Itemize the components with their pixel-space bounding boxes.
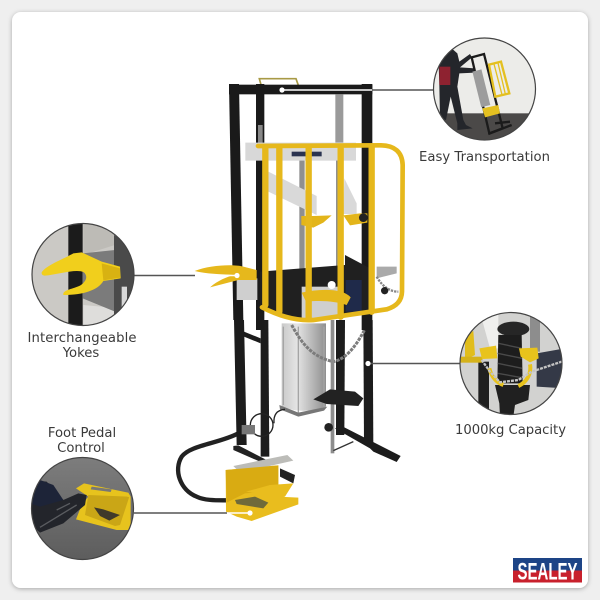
shoe and leg (30, 480, 87, 533)
label: Interchangeable (28, 331, 136, 346)
foot pedal (280, 468, 295, 483)
leader line (365, 361, 460, 366)
label: Foot Pedal (48, 426, 116, 441)
yokes (479, 346, 497, 359)
press rails (472, 54, 503, 133)
lower bed (260, 255, 373, 318)
ram column (335, 94, 343, 143)
hose (178, 433, 238, 500)
callout: easy transportation (279, 37, 550, 165)
pedal (76, 483, 131, 530)
leader line (134, 510, 253, 516)
label: Easy Transportation (419, 150, 550, 165)
cylinder (282, 323, 326, 411)
photo: spring in yokes (460, 313, 562, 414)
frame uprights (229, 84, 243, 320)
front yoke on left (237, 278, 257, 300)
callout: foot pedal control (30, 426, 253, 563)
photo: moving the press (434, 38, 535, 140)
arms (268, 172, 317, 215)
lower yoke (302, 290, 351, 305)
label line 2: Yokes (62, 346, 99, 361)
photo border (32, 458, 134, 560)
feet (488, 122, 512, 134)
photo border (32, 224, 134, 326)
photo: yoke (32, 224, 134, 325)
photo border (460, 312, 562, 414)
illustration: spring compressor upper section (195, 79, 403, 330)
yellow guard (258, 145, 403, 320)
callout: 1000kg capacity (365, 310, 566, 438)
leader line (134, 273, 240, 278)
crosshead (245, 143, 356, 161)
guard (489, 62, 509, 97)
callout: interchangeable yokes (28, 222, 240, 361)
label: 1000kg Capacity (455, 423, 566, 438)
pedal rod and plate (331, 320, 334, 453)
worker (439, 48, 475, 130)
leader line (279, 87, 434, 93)
side chain hook (377, 267, 397, 278)
upper yokes (301, 215, 332, 228)
rear uprights and feet (234, 320, 247, 445)
photo border (434, 38, 536, 140)
valve and loop (250, 414, 273, 436)
chain (482, 360, 562, 382)
photo: foot on pedal (32, 458, 133, 559)
carry handle (259, 79, 298, 85)
illustration: spring compressor lower section (178, 320, 401, 521)
chain (292, 320, 369, 362)
top bar (229, 85, 372, 94)
strut and spring (497, 322, 529, 336)
label line 2: Control (57, 441, 105, 456)
